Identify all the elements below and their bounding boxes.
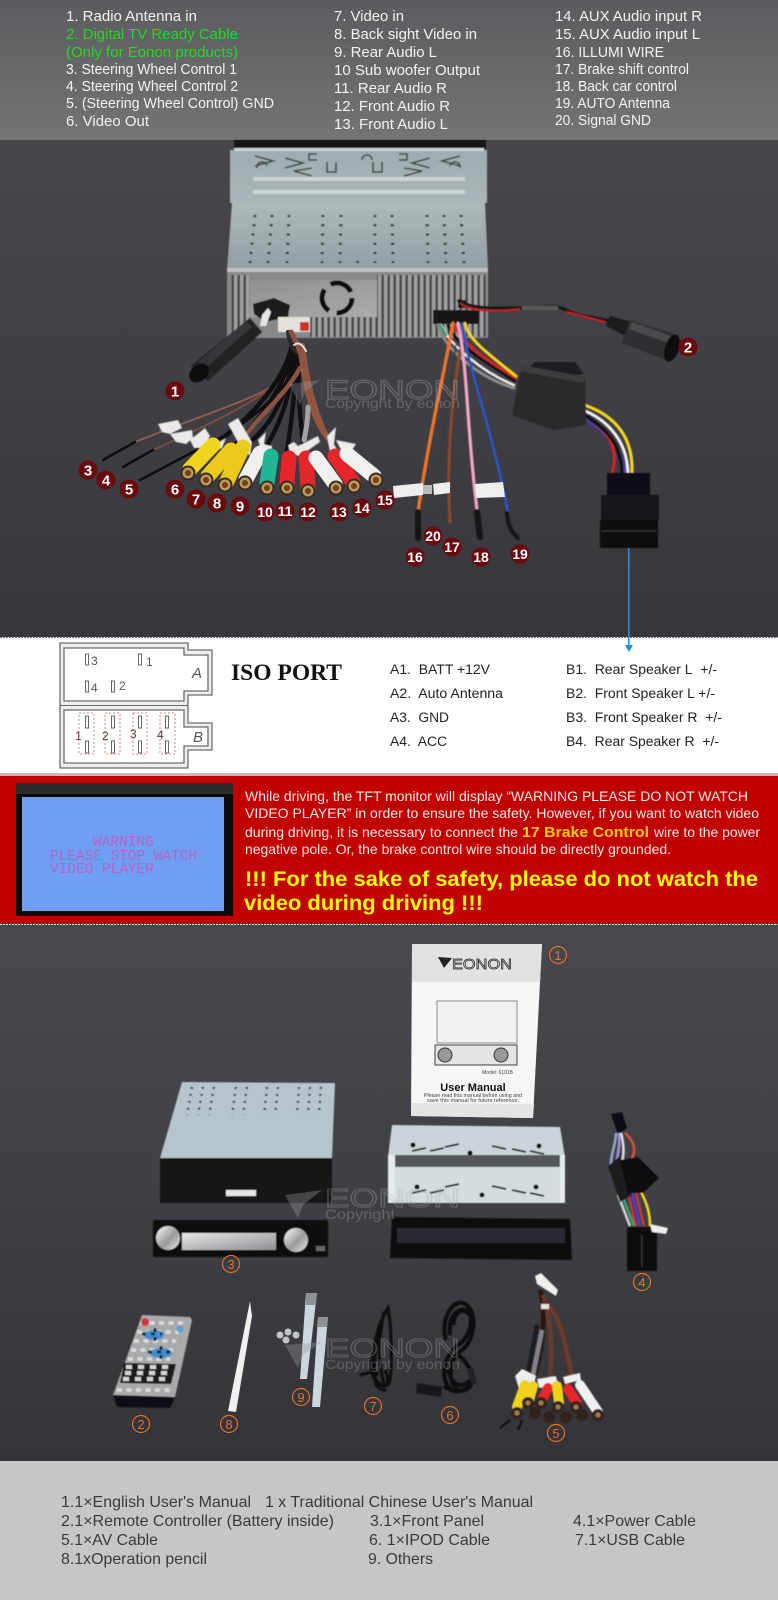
legend column 3: 16. ILLUMI WIRE (555, 45, 664, 61)
panel: package contents photo (0, 924, 778, 1461)
legend column 1: 4. Steering Wheel Control 2 (66, 79, 238, 95)
device rear view (227, 140, 488, 338)
pin list B (566, 662, 722, 749)
legend column 3: 15. AUX Audio input L (555, 27, 700, 43)
numbered badges: 11 (278, 503, 293, 519)
numbered badges: 3 (84, 462, 92, 480)
screws and strips (276, 1293, 328, 1407)
legend column 2 (334, 9, 480, 133)
pin list B: B4. Rear Speaker R +/- (566, 734, 719, 749)
power harness wires (418, 323, 632, 538)
operation pencil (228, 1301, 252, 1412)
USB cable (360, 1308, 391, 1390)
legend column 2: 7. Video in (334, 9, 404, 25)
orange item numbers: 2 (137, 1417, 145, 1432)
pin list A: A1. BATT +12V (390, 662, 490, 677)
DC jack cable 2 (458, 300, 683, 363)
panel: package list: 5.1×AV Cable (61, 1532, 158, 1549)
panel: package list: 8.1xOperation pencil (61, 1551, 207, 1568)
numbered badges: 12 (300, 504, 316, 520)
ISO connector (600, 473, 659, 548)
pin list A (390, 662, 504, 749)
watermarks (285, 1183, 460, 1372)
pin list B: B3. Front Speaker R +/- (566, 710, 722, 725)
legend column 3: 14. AUX Audio input R (555, 9, 702, 25)
numbered badges: 6 (171, 482, 179, 498)
panel: wiring photo (0, 140, 778, 637)
panel: package list: 1.1×English User's Manual (61, 1494, 251, 1511)
warning paragraph: negative pole. Or, the brake control wire should be directly grounded. (245, 841, 671, 857)
legend column 2: 10 Sub woofer Output (334, 63, 480, 79)
legend column 3: 19. AUTO Antenna (555, 96, 671, 112)
legend column 1: 2. Digital TV Ready Cable (66, 27, 238, 43)
orange item numbers: 9 (297, 1390, 305, 1405)
legend column 2: 13. Front Audio L (334, 117, 448, 133)
panel: wire legend header (0, 0, 778, 140)
safety warning heading (244, 867, 758, 915)
warning screen image (16, 783, 233, 916)
orange item markers (132, 946, 650, 1442)
legend column 3 (555, 9, 702, 129)
watermark: Copyright by eonon (325, 395, 460, 411)
watermark (289, 375, 460, 411)
legend column 2: 12. Front Audio R (334, 99, 450, 115)
white wire tags (158, 418, 356, 456)
AV wire fan (103, 332, 336, 480)
panel: package list: 1 x Traditional Chinese User's Manual (265, 1494, 533, 1511)
legend column 1: (Only for Eonon products) (66, 45, 238, 61)
panel: package list: 9. Others (368, 1551, 433, 1568)
ISO connector diagram: 3 (91, 654, 98, 668)
watermarks: Copyright by eonon (325, 1356, 460, 1372)
panel: package list: 2.1×Remote Controller (Battery inside) (61, 1513, 334, 1530)
watermark: EONON (325, 375, 460, 405)
ISO connector diagram: 1 (75, 729, 82, 743)
converter box (512, 362, 586, 430)
user manual: User Manual (440, 1082, 506, 1094)
numbered badges (78, 338, 698, 566)
pin list B: B1. Rear Speaker L +/- (566, 662, 717, 677)
warning paragraph: during driving, it is necessary to connect the (245, 824, 518, 840)
legend column 3: 20. Signal GND (555, 113, 651, 129)
panel: brake warning (0, 773, 778, 924)
legend column 2: 9. Rear Audio L (334, 45, 437, 61)
user manual: save this manual for future reference. (427, 1098, 519, 1104)
heading: ISO PORT: ISO PORT (231, 660, 342, 686)
numbered badges: 20 (425, 528, 441, 544)
legend column 1: 6. Video Out (66, 114, 149, 130)
AV cable (500, 1273, 604, 1430)
ISO connector diagram: 2 (119, 679, 126, 693)
RCA tips (180, 466, 384, 498)
head unit (160, 1082, 335, 1203)
watermarks: EONON (325, 1183, 460, 1213)
front panel (153, 1220, 328, 1257)
black trim frame (390, 1217, 572, 1260)
ISO connector diagram: 1 (146, 655, 153, 669)
numbered badges: 7 (192, 492, 200, 508)
ISO connector diagram: 4 (91, 681, 98, 695)
numbered badges: 1 (171, 384, 179, 400)
power cable (608, 1112, 668, 1271)
legend column 1 (66, 9, 274, 130)
warning paragraph: VIDEO PLAYER” in order to ensure the safety. However, if you want to watch video (245, 805, 759, 821)
warning paragraph: 17 Brake Control (522, 824, 649, 841)
numbered badges: 17 (444, 539, 460, 555)
warning paragraph: wire to the power (653, 824, 760, 840)
numbered badges: 10 (257, 504, 273, 520)
panel: ISO port (0, 637, 778, 773)
numbered badges: 13 (331, 504, 347, 520)
iPod cable (416, 1303, 477, 1397)
pin list A: A3. GND (390, 710, 449, 725)
warning paragraph (245, 788, 760, 857)
orange item numbers: 8 (225, 1417, 233, 1432)
numbered badges: 8 (213, 496, 221, 512)
pin list A: A4. ACC (390, 734, 447, 749)
remote control (113, 1315, 192, 1408)
warning screen image: PLEASE STOP WATCH (50, 849, 197, 865)
panel: package list: 6. 1×IPOD Cable (369, 1532, 490, 1549)
pin list A: A2. Auto Antenna (390, 686, 504, 701)
ISO connector diagram: 2 (102, 729, 109, 743)
orange item numbers: 4 (638, 1275, 646, 1290)
user manual: EONON (452, 956, 512, 973)
legend column 3: 17. Brake shift control (555, 62, 689, 78)
legend column 1: 3. Steering Wheel Control 1 (66, 62, 237, 78)
ISO connector diagram: 3 (130, 727, 137, 741)
orange item numbers: 7 (369, 1399, 377, 1414)
numbered badges: 5 (125, 482, 133, 498)
pin list B: B2. Front Speaker L +/- (566, 686, 715, 701)
white connector (278, 317, 310, 332)
numbered badges: 4 (102, 472, 111, 490)
warning screen image: VIDEO PLAYER (50, 862, 154, 878)
panel: package list: 7.1×USB Cable (575, 1532, 685, 1549)
orange item numbers (137, 948, 646, 1441)
orange item numbers: 1 (554, 948, 562, 963)
panel: package list: 3.1×Front Panel (370, 1513, 484, 1530)
user manual (411, 944, 542, 1118)
callout arrow to ISO port (625, 548, 633, 652)
warning paragraph: While driving, the TFT monitor will display “WARNING PLEASE DO NOT WATCH (245, 788, 748, 804)
numbered badges: 16 (407, 549, 423, 565)
antenna socket (253, 298, 290, 322)
watermarks: Copyright (325, 1206, 395, 1222)
panel: package list: 4.1×Power Cable (573, 1513, 696, 1530)
legend column 3: 18. Back car control (555, 79, 677, 95)
icon: fan (322, 283, 352, 313)
numbered badges: 15 (377, 492, 393, 508)
orange item numbers: 3 (227, 1257, 235, 1272)
ISO connector diagram: A (191, 665, 202, 682)
antenna (185, 318, 262, 386)
legend column 2: 8. Back sight Video in (334, 27, 477, 43)
legend column 1: 5. (Steering Wheel Control) GND (66, 96, 274, 112)
ISO connector diagram: B (193, 729, 203, 746)
user manual: Please read this manual before using and (424, 1093, 522, 1099)
numbered badges: 19 (512, 546, 528, 562)
numbered badges: 9 (236, 498, 244, 516)
ISO connector diagram: 4 (157, 728, 164, 742)
wire tags right (393, 482, 505, 498)
legend column 2: 11. Rear Audio R (334, 81, 447, 97)
numbered badges: 18 (473, 549, 489, 565)
warning screen image: WARNING (93, 835, 154, 851)
safety warning heading: video during driving !!! (244, 891, 483, 915)
orange item numbers: 6 (446, 1408, 454, 1423)
watermarks: EONON (325, 1333, 460, 1363)
ISO connector diagram (60, 643, 212, 768)
safety warning heading: !!! For the sake of safety, please do not watch the (245, 867, 758, 891)
orange item numbers: 5 (552, 1426, 560, 1441)
numbered badges: 2 (684, 340, 692, 356)
mounting sleeve (388, 1125, 565, 1203)
legend column 1: 1. Radio Antenna in (66, 9, 197, 25)
black connector (433, 310, 479, 324)
RCA plugs (190, 445, 374, 486)
numbered badges: 14 (354, 500, 370, 516)
user manual: Model: 6101B (482, 1070, 514, 1076)
panel: package list (0, 1461, 778, 1600)
